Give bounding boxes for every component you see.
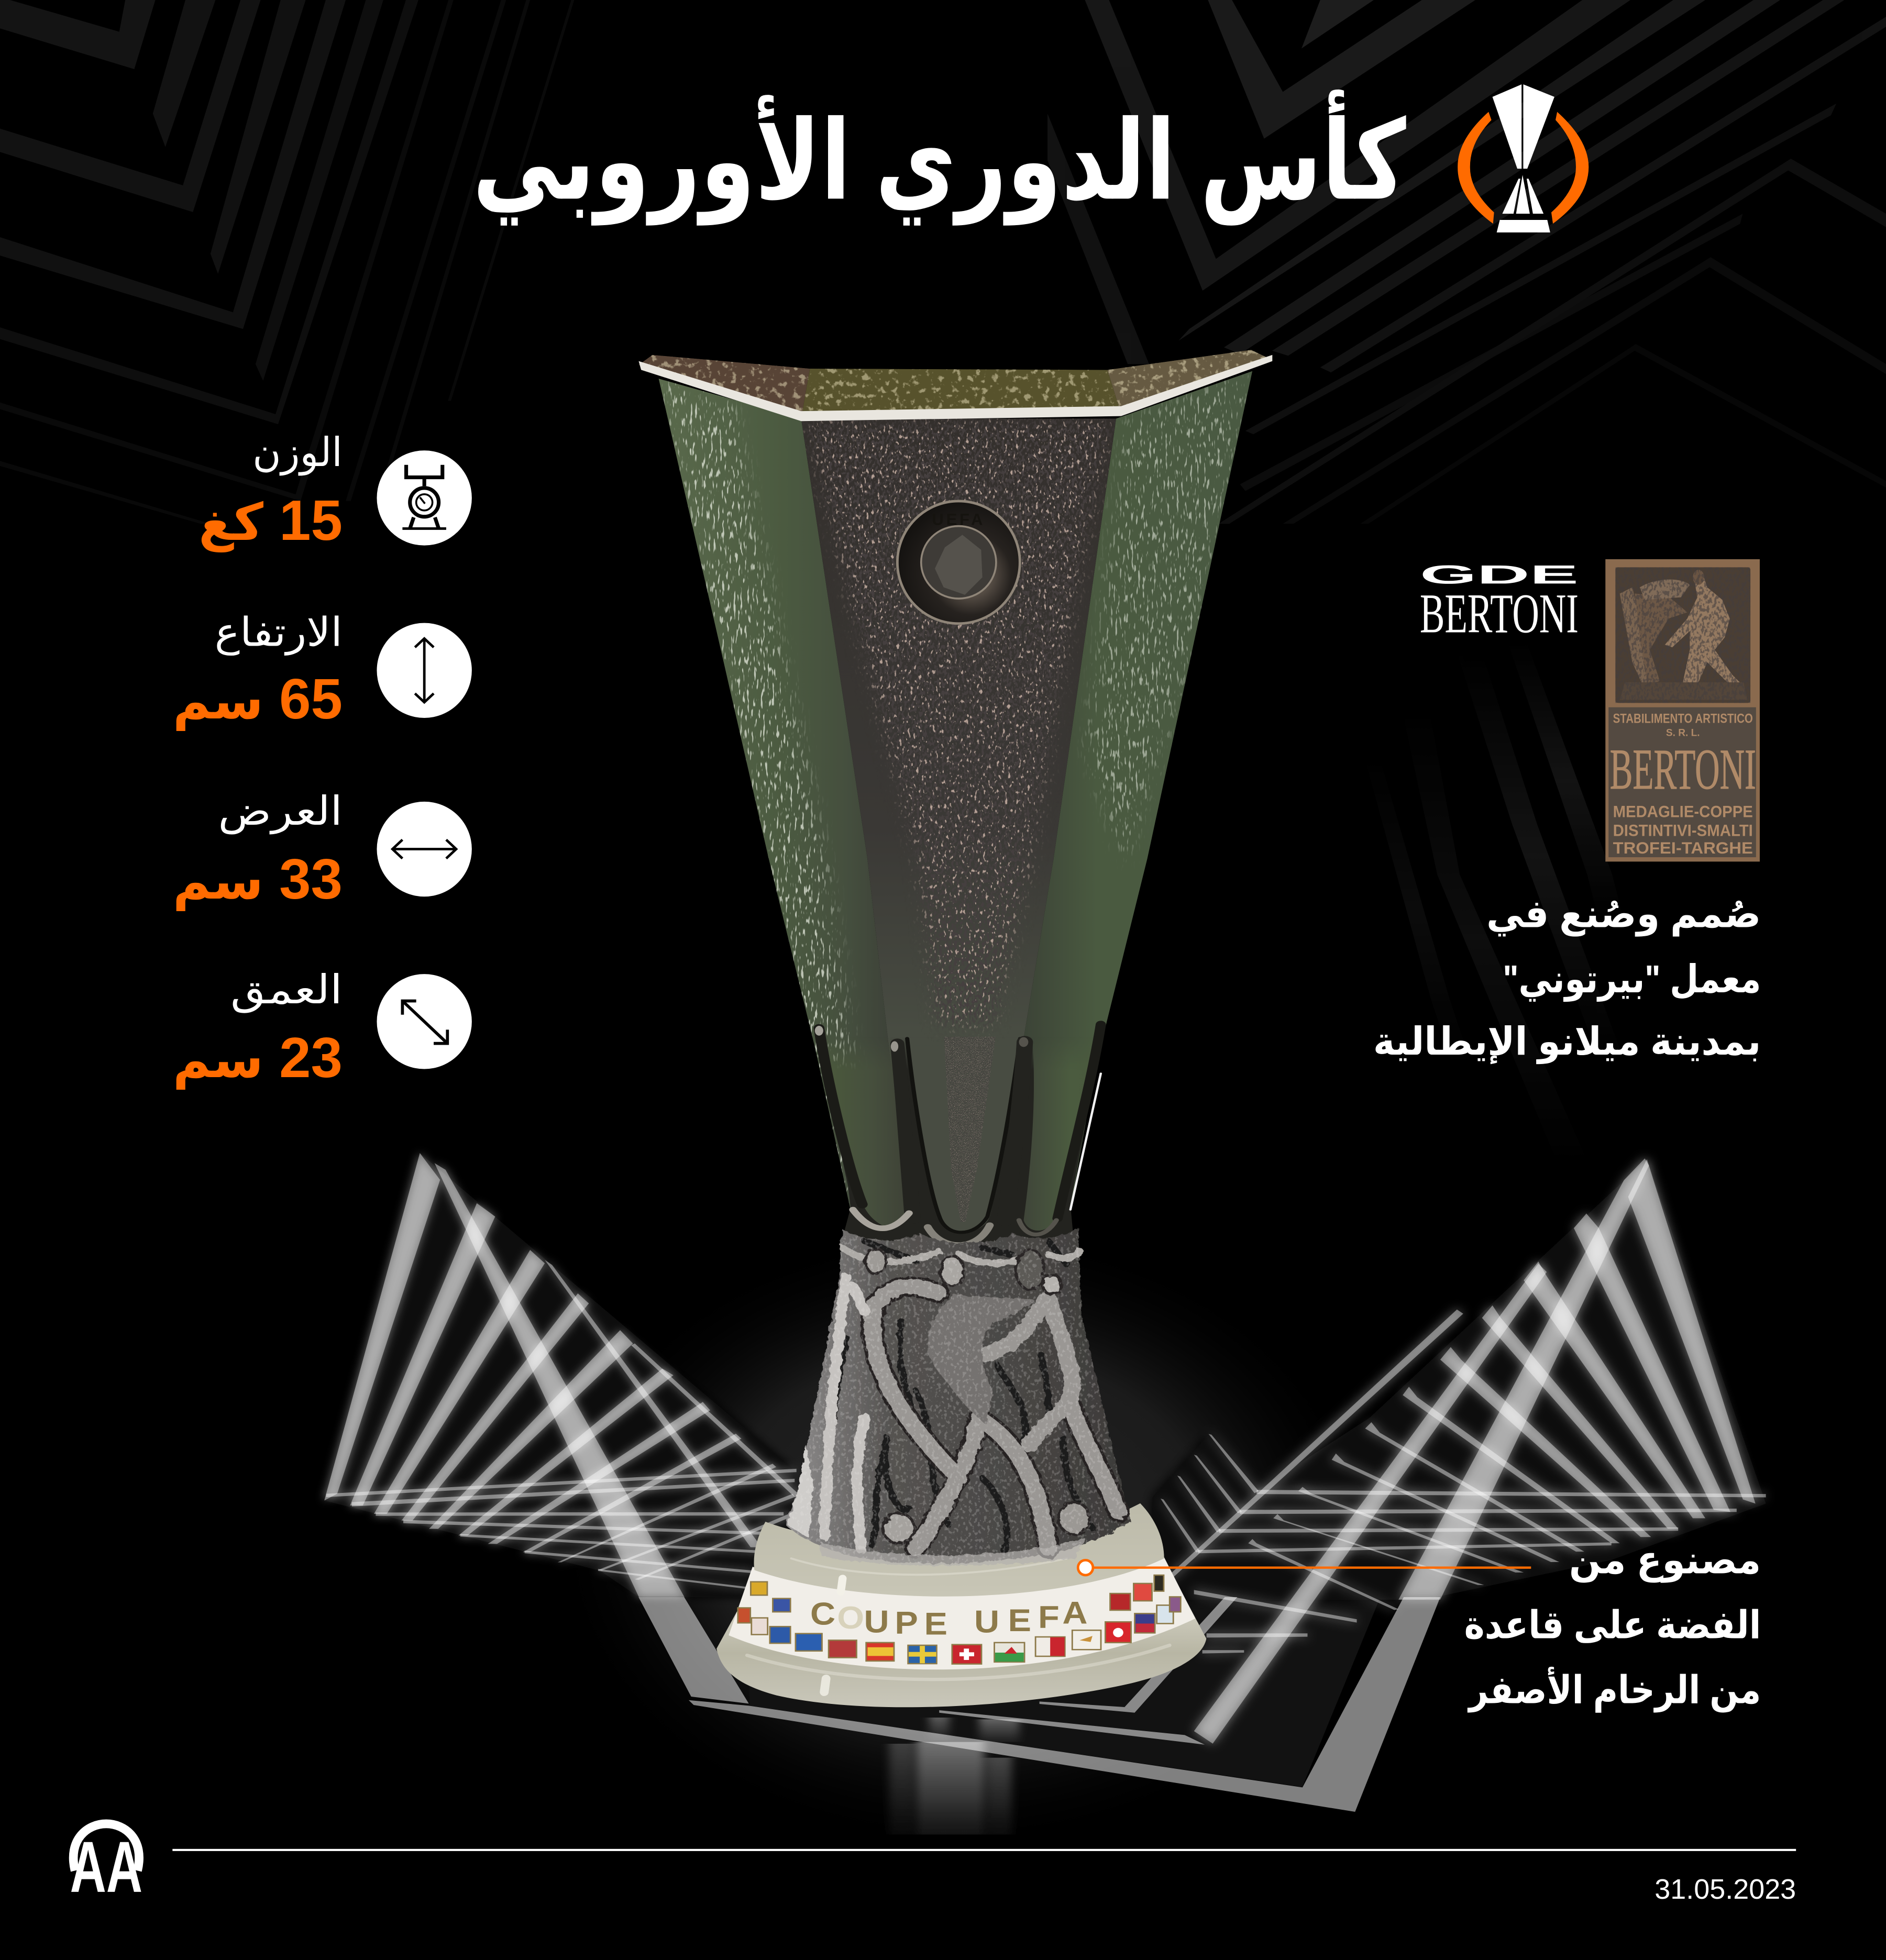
left big strip end bbox=[638, 1597, 749, 1703]
stat: height: الارتفاع bbox=[215, 610, 343, 656]
UEFA medallion: UEFA bbox=[932, 510, 985, 528]
stat: height: 65 سم bbox=[173, 668, 343, 731]
upper marble ring bbox=[754, 1503, 1164, 1597]
plaque lettering: DISTINTIVI-SMALTI bbox=[1613, 821, 1753, 839]
silver surface texture bbox=[784, 1224, 1137, 1568]
trophy right panel bbox=[1024, 371, 1252, 1204]
Anadolu Agency logo bbox=[70, 1824, 142, 1908]
stat: height bbox=[173, 610, 472, 731]
GDE Bertoni logo: GDE bbox=[1420, 560, 1579, 589]
Bertoni bronze plaque bbox=[1605, 559, 1760, 861]
flags upper row bbox=[751, 1575, 1164, 1612]
flags lower row bbox=[738, 1597, 1181, 1664]
icon: horizontal arrow bbox=[392, 840, 456, 858]
plaque lettering: TROFEI-TARGHE bbox=[1613, 839, 1753, 857]
plaque lettering: STABILIMENTO ARTISTICO bbox=[1613, 712, 1753, 726]
text block: materials: مصنوع من bbox=[1569, 1538, 1761, 1583]
second chevron arm bbox=[939, 1710, 1205, 1745]
cup lettering: O bbox=[837, 1600, 864, 1635]
floor behind lower chevrons bbox=[744, 1549, 1400, 1787]
trophy cup inner rim bbox=[639, 350, 1266, 412]
cup lettering: F bbox=[1038, 1600, 1060, 1635]
plaque lettering bbox=[1610, 712, 1756, 857]
stat: weight: 15 كغ bbox=[198, 489, 343, 552]
trophy lower tongues and ribs bbox=[815, 1025, 1103, 1245]
trophy white rim bbox=[638, 355, 1272, 421]
text block: materials: الفضة على قاعدة bbox=[1464, 1603, 1761, 1646]
plaque lettering: MEDAGLIE-COPPE bbox=[1613, 803, 1753, 821]
text block: design origin: صُمم وصُنع في bbox=[1486, 893, 1761, 937]
plaque relief: worker at press bbox=[1615, 567, 1750, 703]
cup lettering bbox=[810, 1595, 1087, 1642]
trophy centre panel bbox=[801, 418, 1116, 1066]
stat: depth bbox=[173, 968, 472, 1090]
stat: depth: العمق bbox=[230, 968, 343, 1013]
stat: width bbox=[173, 789, 472, 911]
reflection streaks bbox=[889, 1718, 1019, 1834]
marble foot bbox=[716, 1599, 1206, 1707]
background chevrons top left bbox=[0, 0, 574, 524]
text block: design origin: بمدينة ميلانو الإيطالية bbox=[1373, 1020, 1761, 1065]
lower chevron strips and reflection bbox=[638, 1597, 1440, 1834]
text block: design origin: معمل "بيرتوني" bbox=[1503, 957, 1761, 1002]
background chevrons top right bbox=[1047, 0, 1886, 524]
icon: scale bbox=[402, 465, 446, 528]
cup lettering: U bbox=[974, 1604, 999, 1640]
callout connector line and dot bbox=[1078, 1560, 1531, 1575]
plaque lettering: BERTONI bbox=[1610, 737, 1756, 801]
GDE Bertoni logo: BERTONI bbox=[1420, 582, 1579, 645]
cup lettering: E bbox=[924, 1606, 947, 1642]
stat: weight bbox=[198, 430, 472, 552]
stat: depth: 23 سم bbox=[173, 1026, 343, 1090]
cup lettering: A bbox=[1062, 1595, 1087, 1631]
stat: width: العرض bbox=[218, 789, 343, 835]
plaque lettering: S. R. L. bbox=[1666, 728, 1700, 739]
text block: materials: من الرخام الأصفر bbox=[1468, 1666, 1761, 1713]
europa league logo icon bbox=[1458, 84, 1589, 232]
white flag band bbox=[729, 1555, 1195, 1669]
third chevron bbox=[1040, 1701, 1134, 1713]
GDE Bertoni logo bbox=[1420, 560, 1579, 645]
icon: diagonal arrow bbox=[402, 1001, 447, 1044]
marble highlights bbox=[747, 1558, 1170, 1692]
trophy base bbox=[716, 1224, 1206, 1707]
UEFA medallion bbox=[897, 501, 1020, 624]
right light grid bbox=[1152, 1158, 1766, 1744]
footer rule bbox=[172, 1849, 1796, 1851]
cup lettering: P bbox=[895, 1605, 918, 1641]
trophy left panel bbox=[659, 379, 891, 1208]
left light grid bbox=[324, 1153, 802, 1597]
outer chevron bbox=[689, 1597, 1440, 1812]
title: كأس الدوري الأوروبي bbox=[472, 90, 1406, 226]
text block: materials bbox=[1464, 1538, 1761, 1713]
Anadolu Agency logo: AA bbox=[70, 1827, 142, 1908]
stat: weight: الوزن bbox=[252, 430, 343, 475]
trophy bbox=[631, 347, 1281, 1707]
background rays behind right block bbox=[1362, 637, 1625, 1175]
cup lettering: C bbox=[810, 1596, 835, 1632]
stat: width: 33 سم bbox=[173, 848, 343, 911]
cup lettering: U bbox=[864, 1604, 889, 1640]
icon: vertical arrow bbox=[415, 638, 434, 702]
date: 31.05.2023 bbox=[1655, 1874, 1796, 1905]
silver figures bbox=[786, 1228, 1131, 1566]
text block: design origin bbox=[1373, 893, 1761, 1065]
cup lettering: E bbox=[1008, 1603, 1031, 1638]
haze behind trophy base bbox=[550, 1225, 1375, 1850]
